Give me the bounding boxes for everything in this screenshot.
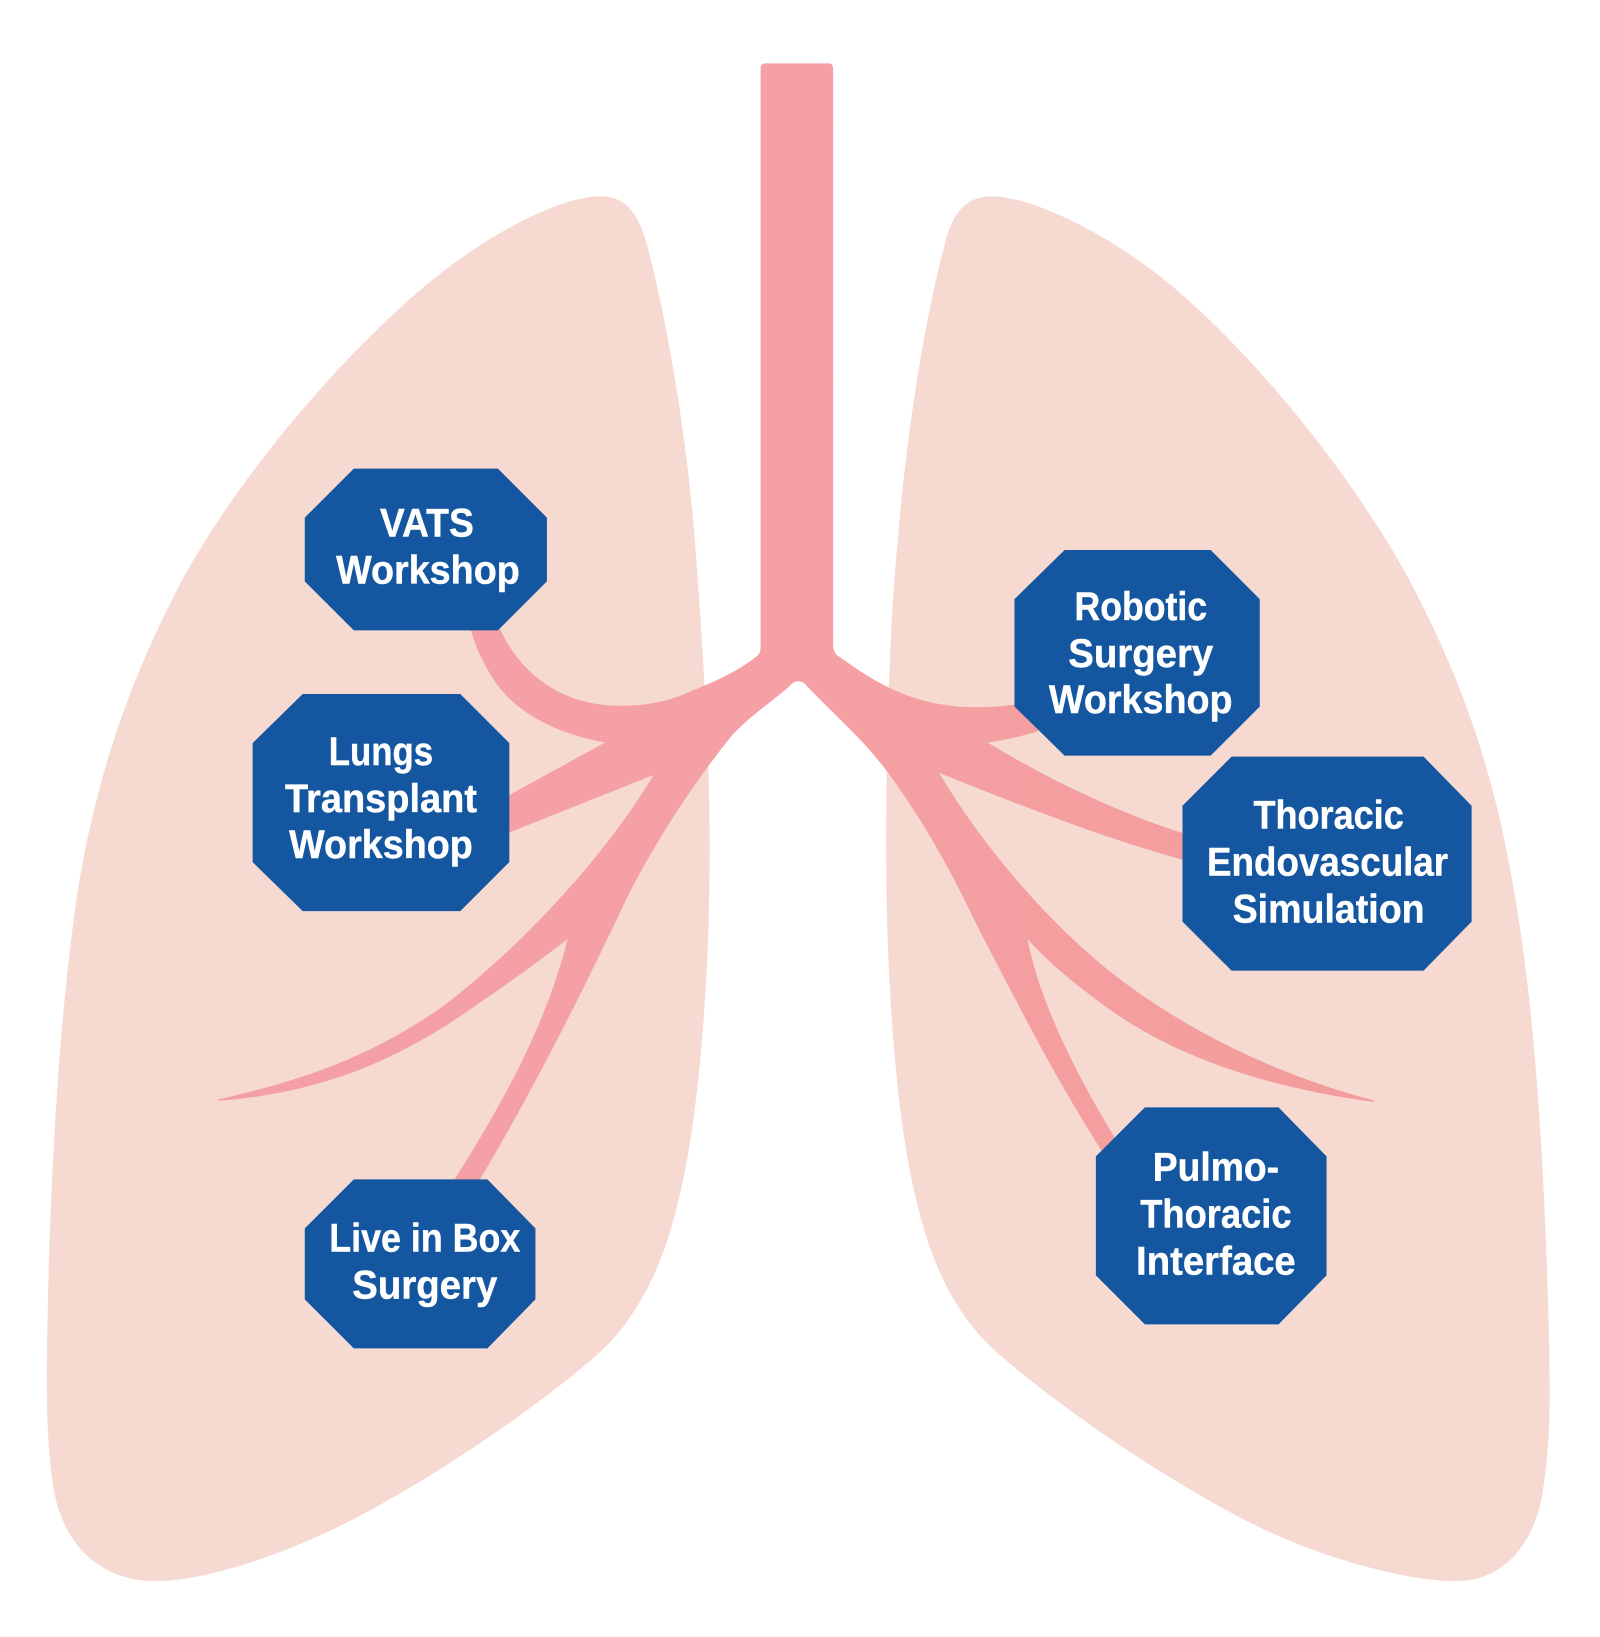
box: Robotic Surgery Workshop: [1014, 550, 1260, 756]
box: Thoracic Endovascular Simulation: [1183, 757, 1472, 971]
box: Pulmo-Thoracic Interface: Thoracic: [1140, 1192, 1292, 1236]
box: Thoracic Endovascular Simulation: Endovascular: [1207, 841, 1448, 885]
box: Lungs Transplant Workshop: Workshop: [289, 823, 473, 867]
box: Live in Box Surgery: Live in Box: [329, 1216, 520, 1260]
box: Robotic Surgery Workshop: Workshop: [1049, 678, 1233, 722]
right lung: [886, 196, 1550, 1581]
box: Pulmo-Thoracic Interface: Pulmo-: [1153, 1145, 1279, 1189]
trachea and bronchial tree: [219, 64, 1373, 1185]
box: Robotic Surgery Workshop: Robotic: [1074, 585, 1207, 629]
box: VATS Workshop: Workshop: [336, 548, 520, 592]
box: VATS Workshop: [305, 469, 547, 630]
box: Lungs Transplant Workshop: Transplant: [285, 777, 477, 821]
box: Pulmo-Thoracic Interface: [1096, 1107, 1327, 1324]
box: Lungs Transplant Workshop: Lungs: [329, 730, 433, 774]
box: Thoracic Endovascular Simulation: Thoracic: [1253, 794, 1404, 838]
box: Pulmo-Thoracic Interface: Interface: [1136, 1239, 1296, 1283]
box: Lungs Transplant Workshop: [253, 694, 509, 911]
box: Live in Box Surgery: [305, 1179, 535, 1348]
box: Robotic Surgery Workshop: Surgery: [1068, 632, 1213, 676]
left lung: [47, 196, 710, 1581]
box: Thoracic Endovascular Simulation: Simulation: [1233, 888, 1425, 932]
box: Live in Box Surgery: Surgery: [352, 1263, 497, 1307]
box: VATS Workshop: VATS: [380, 501, 474, 545]
